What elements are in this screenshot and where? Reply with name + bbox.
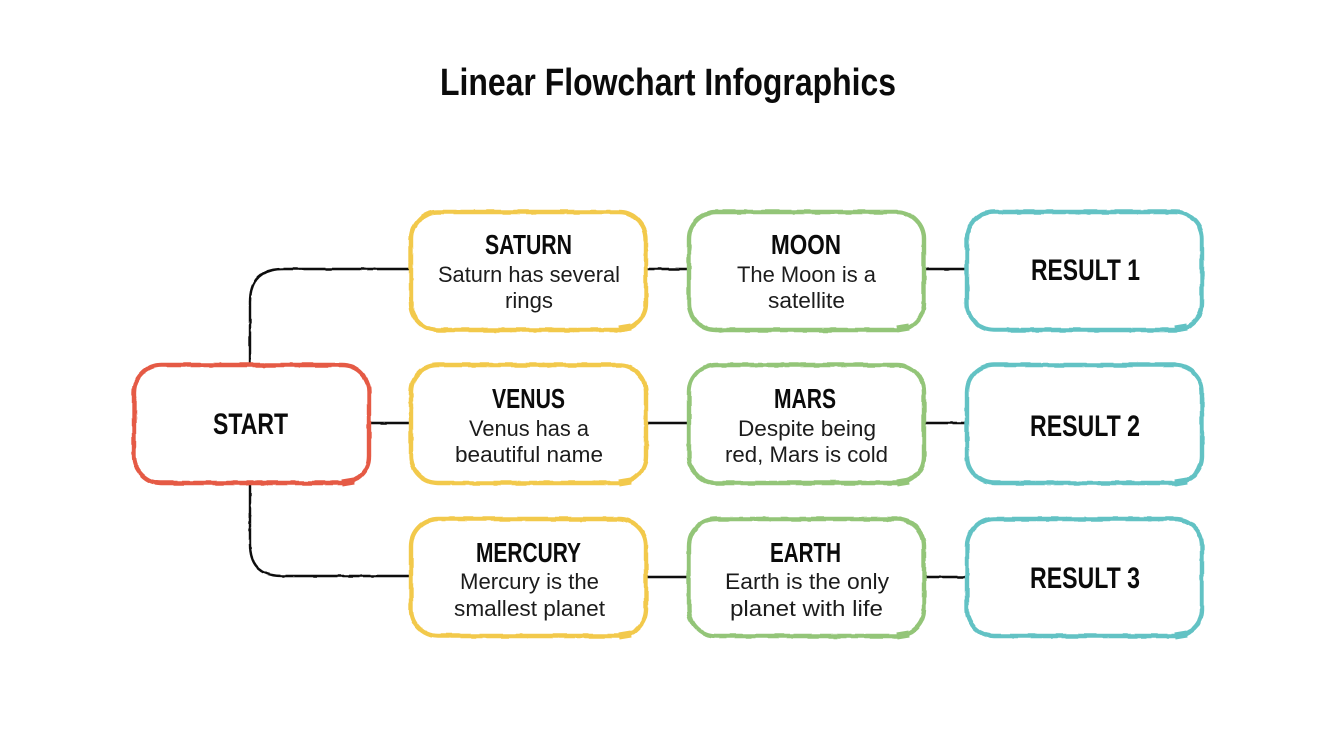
box: result 2 xyxy=(967,365,1202,483)
box: saturn xyxy=(411,212,646,330)
box: earth: Earth is the only xyxy=(725,569,889,594)
box: venus xyxy=(411,365,646,483)
box: mars: red, Mars is cold xyxy=(725,442,888,467)
box: earth xyxy=(689,519,924,636)
box: moon: The Moon is a xyxy=(737,262,877,287)
box: venus: beautiful name xyxy=(455,442,603,467)
box: venus: VENUS xyxy=(492,383,565,414)
box: earth: planet with life xyxy=(730,596,883,621)
box: mercury: MERCURY xyxy=(476,537,581,568)
box: mercury: smallest planet xyxy=(454,596,605,621)
box: result 1: RESULT 1 xyxy=(1031,254,1140,287)
box: saturn: SATURN xyxy=(485,229,572,260)
box: mercury xyxy=(411,519,646,636)
connectors xyxy=(250,269,967,577)
box: moon: satellite xyxy=(768,288,845,313)
box: result 2: RESULT 2 xyxy=(1030,410,1140,443)
box: moon: MOON xyxy=(771,229,841,260)
box: mercury: Mercury is the xyxy=(460,569,599,594)
box: moon xyxy=(689,212,924,330)
box: result 1 xyxy=(967,212,1202,330)
box: mars: MARS xyxy=(774,383,836,414)
box: mars: Despite being xyxy=(738,416,876,441)
box: start xyxy=(134,365,369,483)
box: mars xyxy=(689,365,924,483)
box: result 3 xyxy=(967,519,1202,636)
title: Linear Flowchart Infographics xyxy=(440,62,896,104)
box: start: START xyxy=(213,408,288,441)
box: earth: EARTH xyxy=(770,537,841,568)
box: venus: Venus has a xyxy=(469,416,590,441)
box: saturn: Saturn has several xyxy=(438,262,620,287)
box: saturn: rings xyxy=(505,288,553,313)
box: result 3: RESULT 3 xyxy=(1030,562,1140,595)
